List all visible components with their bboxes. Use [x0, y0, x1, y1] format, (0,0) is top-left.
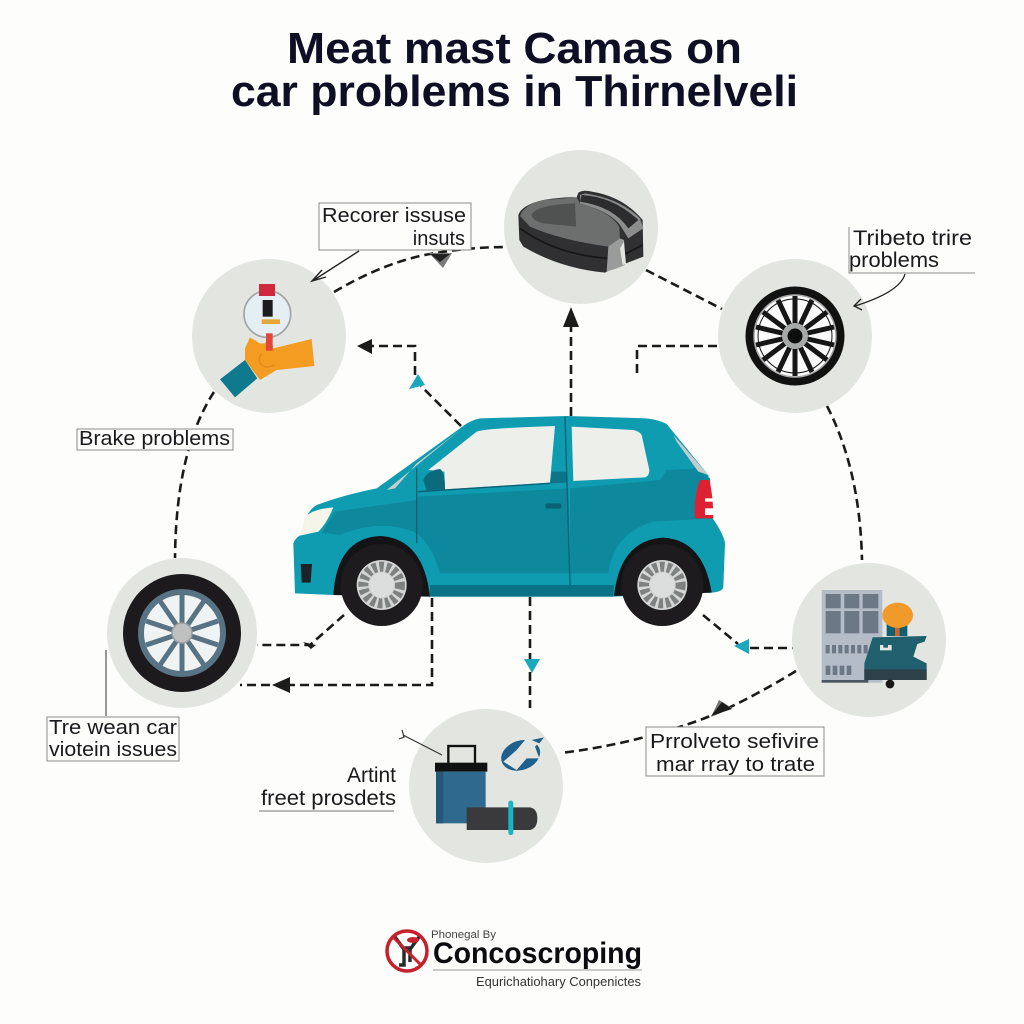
- icon: workshop building and machine: [822, 590, 927, 688]
- panel: issue circle top right (wheel): [718, 259, 872, 413]
- windows: [428, 426, 555, 489]
- panel: issue circle top (tyre): [504, 150, 658, 304]
- label: recorer issue: insuts: [413, 228, 465, 250]
- footer logo: Equrichatiohary Conpenictes: [476, 974, 641, 989]
- icon: spoked wheel: [746, 286, 844, 386]
- label: tribeto trire: problems: [849, 249, 939, 272]
- panel: issue circle right (workshop): [792, 563, 946, 717]
- label: tribeto trire: Tribeto trire: [853, 227, 972, 250]
- title: Meat mast Camas on: [287, 24, 742, 73]
- sill: [430, 585, 614, 597]
- wheel arches: [333, 536, 430, 597]
- mirror: [423, 469, 445, 491]
- door handle: [545, 503, 561, 509]
- door lines: [417, 417, 570, 585]
- title: [231, 24, 798, 116]
- front wheel: [341, 544, 423, 626]
- label: artint: Artint: [347, 764, 396, 787]
- panel: issue circle top left (hand with magnifier): [192, 259, 346, 413]
- dashed connector ring: [175, 247, 862, 753]
- panel: issue circle bottom (parts): [409, 709, 563, 863]
- car body: [293, 416, 725, 597]
- label: tribeto trire: [849, 227, 975, 310]
- bumper vent: [301, 564, 312, 583]
- icon: hand holding magnifier: [220, 284, 314, 397]
- footer logo: Concoscroping: [433, 937, 642, 970]
- label: tre wean car: viotein issues: [49, 739, 177, 761]
- icon: cut tyre: [518, 191, 643, 273]
- label: tre wean car: Tre wean car: [49, 717, 177, 739]
- label: recorer issue: Recorer issuse: [322, 205, 466, 227]
- label: brake problems: Brake problems: [79, 428, 230, 450]
- footer logo: [387, 929, 642, 989]
- label: prolveto sefivire: Prrolveto sefivire: [650, 730, 819, 753]
- icon: prohibition badge: [387, 931, 427, 971]
- body side shade: [322, 488, 570, 573]
- tail light: [695, 480, 713, 518]
- label: tre wean car: [47, 650, 179, 761]
- label: prolveto sefivire: mar rray to trate: [656, 753, 815, 776]
- rear wheel: [621, 544, 703, 626]
- panel: issue circle left (wheel): [107, 558, 257, 708]
- icon: battery, tyre and badge: [435, 735, 544, 835]
- label: artint: [259, 730, 442, 811]
- label: prolveto sefivire: [646, 727, 824, 776]
- footer logo: Phonegal By: [431, 929, 497, 941]
- arrowheads: [272, 253, 749, 717]
- label: recorer issue: [312, 203, 471, 281]
- label: artint: freet prosdets: [261, 787, 396, 810]
- icon: blue-grey wheel: [123, 574, 241, 692]
- headlight: [300, 507, 333, 536]
- title: car problems in Thirnelveli: [231, 67, 798, 116]
- car: [293, 416, 725, 626]
